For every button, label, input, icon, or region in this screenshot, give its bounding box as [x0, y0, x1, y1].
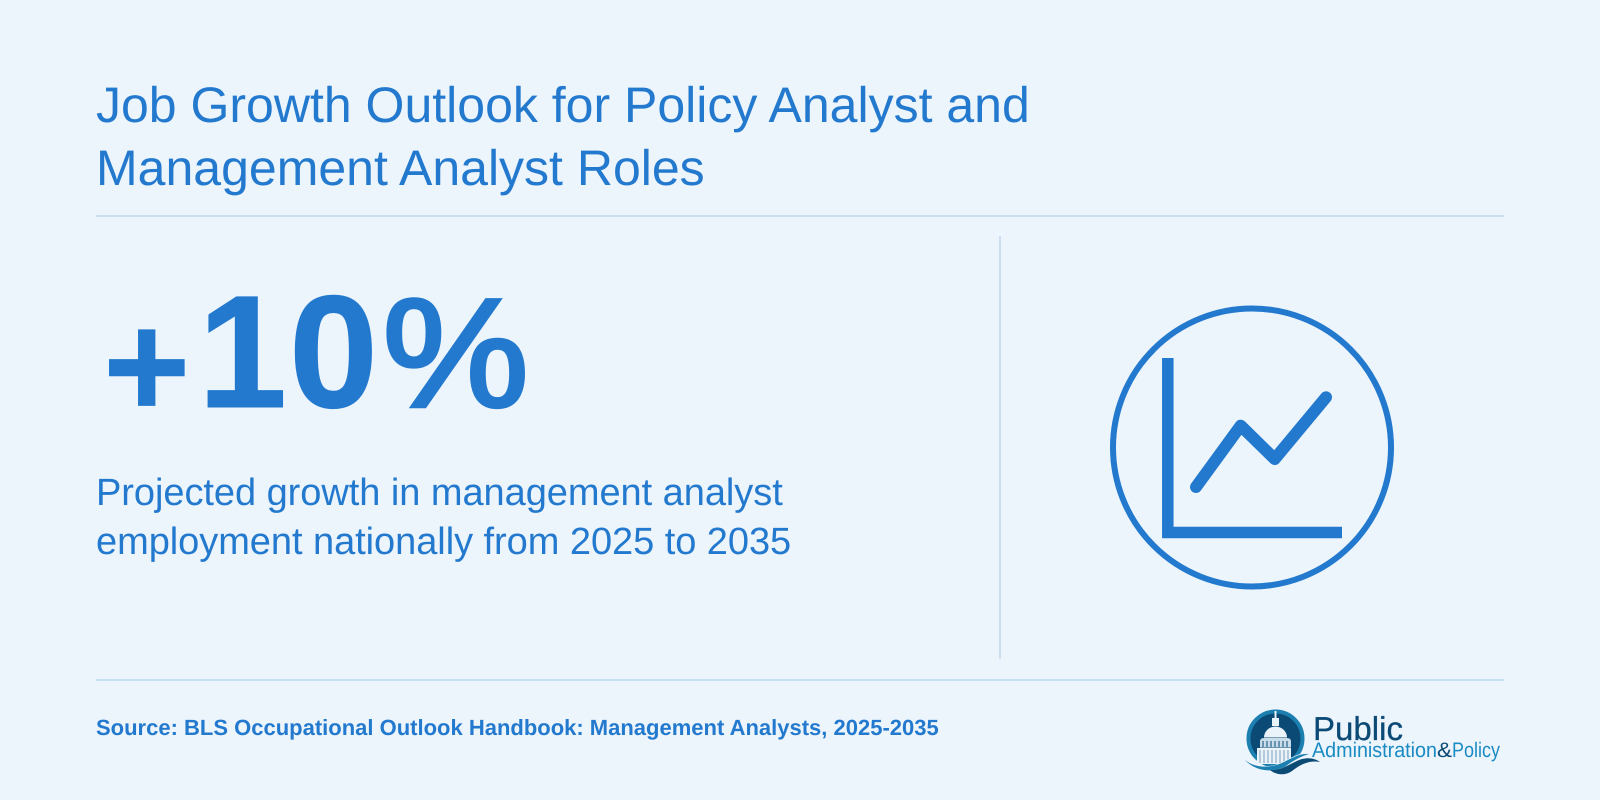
source: Source: BLS Occupational Outlook Handbook: Management Analysts, 2025-2035 [96, 715, 939, 740]
icon: line chart in circle [1110, 306, 1394, 590]
big statistic: + [103, 282, 190, 449]
logo wordmark: Public [1313, 710, 1403, 747]
logo [1245, 710, 1500, 774]
title: Job Growth Outlook for Policy Analyst and [96, 77, 1030, 133]
icon: capitol dome [1245, 711, 1320, 774]
logo wordmark: Administration [1312, 739, 1437, 762]
statistic description: Projected growth in management analyst [96, 472, 783, 514]
big statistic: 1 [198, 262, 287, 441]
title: Management Analyst Roles [96, 140, 705, 196]
statistic description [96, 472, 791, 563]
title [96, 77, 1030, 196]
logo wordmark: Policy [1452, 739, 1500, 762]
big statistic: 0 [289, 262, 378, 441]
logo wordmark [1312, 710, 1500, 762]
big statistic [103, 262, 529, 449]
statistic description: employment nationally from 2025 to 2035 [96, 521, 791, 563]
big statistic: % [382, 267, 529, 439]
logo wordmark: & [1437, 739, 1452, 762]
